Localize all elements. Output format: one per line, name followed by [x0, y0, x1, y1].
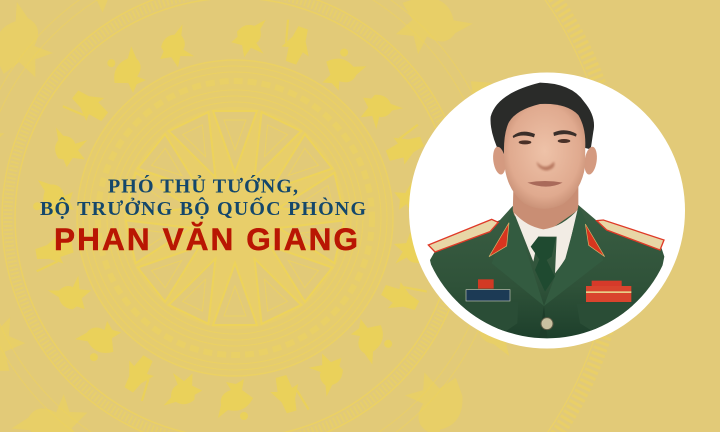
medal ribbons: [586, 281, 631, 302]
tie: [531, 237, 556, 292]
shirt collar: [514, 209, 579, 273]
right shoulder board: [597, 220, 664, 250]
white circle frame: [409, 72, 685, 348]
flag badge: [478, 279, 494, 289]
button: [541, 318, 553, 330]
mouth: [527, 181, 563, 187]
hair: [491, 83, 594, 154]
name tag: [466, 290, 510, 301]
neck: [513, 183, 578, 237]
left shoulder board: [428, 219, 498, 252]
nose shadow: [537, 162, 555, 171]
title: name: PHAN VĂN GIANG: [54, 221, 358, 257]
lapels: [492, 208, 544, 306]
left collar tab: [489, 223, 509, 257]
title: position line 1: PHÓ THỦ TƯỚNG,: [108, 174, 298, 198]
eyebrows: [513, 132, 535, 138]
uniform jacket: [430, 205, 664, 340]
title: position line 2: BỘ TRƯỞNG BỘ QUỐC PHÒNG: [40, 196, 366, 220]
eyes: [519, 140, 531, 144]
face: [504, 104, 585, 209]
right collar tab: [585, 224, 605, 257]
portrait circle: [409, 72, 685, 348]
portrait of the general: [428, 83, 664, 340]
ears: [491, 146, 507, 175]
pockets: [457, 302, 518, 331]
